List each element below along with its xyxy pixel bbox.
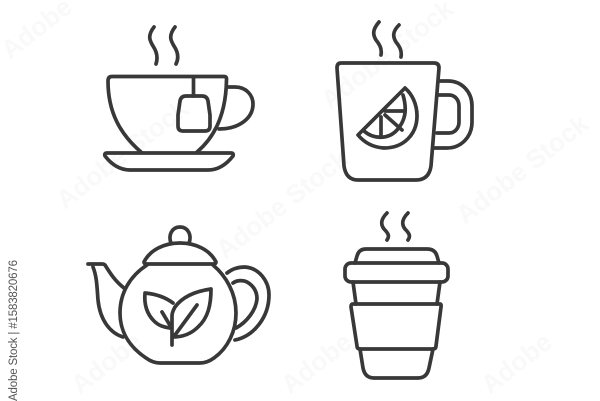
takeaway base — [360, 349, 433, 378]
takeaway steam — [382, 213, 409, 240]
watermark pattern: Adobe — [65, 326, 147, 400]
lemon slice — [358, 88, 417, 148]
takeaway sleeve — [351, 304, 441, 349]
icon: tea cup with tea bag — [105, 27, 253, 170]
takeaway upper body — [353, 282, 440, 304]
icon: teapot with leaves — [88, 227, 269, 363]
icon: mug with lemon slice — [337, 22, 472, 180]
watermark pattern: Adobe Stock — [50, 93, 194, 215]
tea bag — [178, 96, 210, 131]
teapot handle — [227, 267, 269, 340]
watermark pattern: Adobe Stock — [210, 143, 354, 265]
cup steam — [150, 27, 178, 64]
teapot knob — [170, 227, 190, 243]
teapot body — [120, 265, 236, 363]
takeaway lid top — [355, 249, 439, 263]
watermark pattern: Adobe — [275, 326, 357, 400]
saucer — [105, 153, 233, 170]
teapot spout — [88, 264, 124, 337]
watermark pattern: Adobe — [475, 326, 557, 400]
mug steam — [374, 22, 401, 57]
mug body — [337, 63, 439, 180]
teapot lid — [144, 243, 216, 264]
mug handle — [435, 81, 472, 148]
takeaway lid rim — [345, 263, 448, 282]
icon: takeaway cup — [345, 213, 448, 378]
stock image id side text: Adobe Stock | #1583820676 — [8, 260, 20, 401]
cup handle — [219, 87, 253, 129]
tea leaves — [145, 289, 211, 345]
cup body — [108, 76, 227, 152]
tea bag string — [192, 78, 195, 96]
watermark pattern: Adobe Stock — [450, 108, 594, 230]
